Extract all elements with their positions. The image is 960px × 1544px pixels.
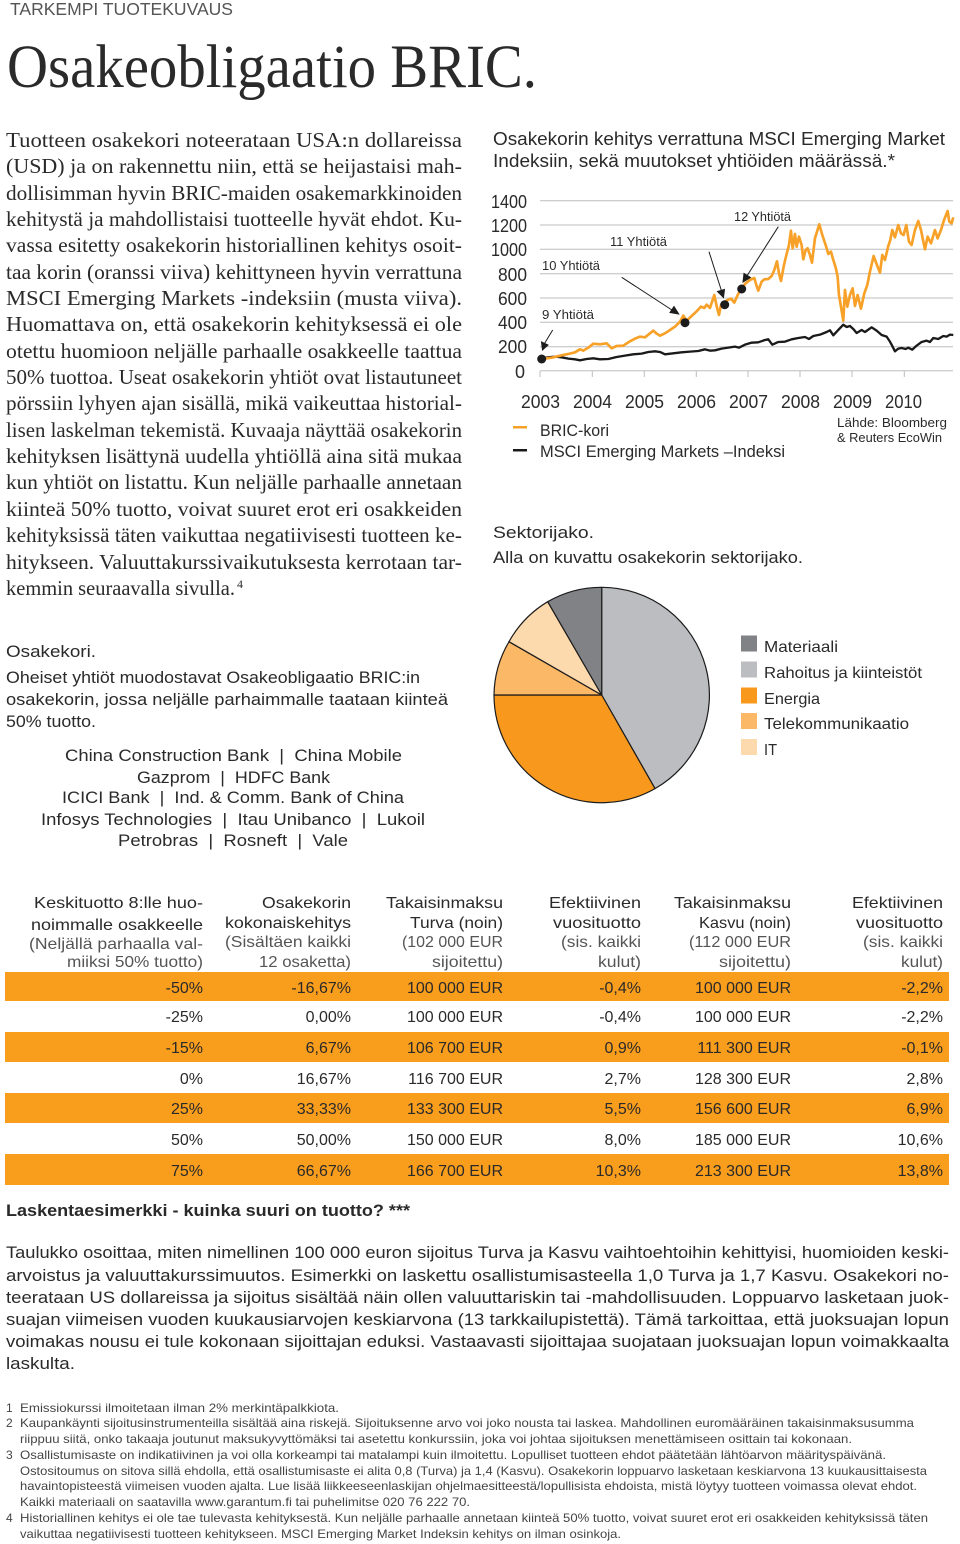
table header: (Sisältäen kaikki — [225, 934, 351, 951]
chart source note: Lähde: Bloomberg — [837, 415, 947, 430]
footnotes: Historiallinen kehitys ei ole tae tulevasta kehityksestä. Kun neljälle parhaalle annetaan kiinteä 50% tuotto, voivat suuret erot eri osakkeiden kehityksissä täten — [20, 1511, 928, 1525]
text block: basket — [6, 642, 449, 731]
chart legend: MSCI Emerging Markets –Indeksi — [540, 443, 785, 461]
company list — [41, 746, 425, 850]
table header: kulut) — [598, 954, 641, 971]
y axis labels: 1400 — [491, 192, 527, 212]
text block: product description: kehityksissä täten vaikuttaa negatiivisesti tuotteen ke- — [6, 523, 462, 547]
line chart — [491, 192, 953, 412]
table rows: 25% — [171, 1101, 203, 1118]
x axis labels — [521, 392, 922, 412]
table rows: 0,9% — [605, 1040, 641, 1057]
series: MSCI Emerging Markets — [542, 325, 953, 360]
table header: kulut) — [901, 954, 943, 971]
footnotes: 2 — [6, 1416, 13, 1430]
pie legend: Rahoitus ja kiinteistöt — [764, 665, 923, 682]
table rows: -2,2% — [901, 1009, 943, 1026]
table header: vuosituotto — [553, 915, 641, 932]
heading: sector split: Sektorijako. — [493, 523, 594, 542]
chart source note: & Reuters EcoWin — [837, 430, 942, 445]
footnotes — [6, 1401, 928, 1541]
text block: calculation example: arvoistus ja valuuttakurssimuutos. Esimerkki on laskettu osallistumisasteella 1,0 Turva ja 1,7 Kasvu. Osakekori no- — [6, 1266, 949, 1285]
table rows: -2,2% — [901, 980, 943, 997]
table rows: 10,6% — [898, 1132, 943, 1149]
calculation heading: Laskentaesimerkki - kuinka suuri on tuotto? *** — [6, 1201, 410, 1220]
table rows: 213 300 EUR — [695, 1163, 791, 1180]
text block: product description: kehityksen lisättynä uudella yhtiöllä aina sitä mukaa — [6, 444, 463, 468]
text block: basket: Osakekori. — [6, 642, 96, 661]
pie chart: sectors — [494, 587, 709, 803]
chart legend: BRIC-kori — [540, 422, 609, 440]
pie legend: Materiaali — [764, 639, 838, 656]
table rows: 100 000 EUR — [695, 1009, 791, 1026]
text block: calculation example: voimakas nousu ei tule kokonaan sijoittajan eduksi. Vastaavasti sijoittajaa suojataan juoksuajan lopun voimakkaalta — [6, 1332, 950, 1351]
footnotes: Ostositoumus on sitova sillä ehdolla, että osallistumisaste ei alita 0,8 (Turva) ja 1,4 (Kasvu). Osakekorin loppuarvo lasketaan keskiarvona 13 kuukausittaisesta — [20, 1464, 927, 1478]
table header: vuosituotto — [856, 915, 943, 932]
text block: product description: otettu huomioon neljälle parhaalle osakkeelle taattua — [6, 339, 463, 363]
table rows: 2,8% — [907, 1071, 943, 1088]
y axis labels: 1000 — [491, 240, 527, 260]
text block: product description: 4 — [237, 577, 243, 591]
text block: product description: (USD) ja on rakennettu niin, että se heijastaisi mah- — [6, 154, 462, 178]
company list: Infosys Technologies | Itau Unibanco | Lukoil — [41, 810, 425, 829]
x axis labels: 2005 — [625, 392, 664, 412]
footnotes: 1 — [6, 1401, 13, 1415]
table rows: 111 300 EUR — [697, 1040, 791, 1057]
table rows: 75% — [171, 1163, 203, 1180]
table rows: 166 700 EUR — [407, 1163, 503, 1180]
text block: basket: 50% tuotto. — [6, 712, 96, 731]
footnotes: havaintopisteestä viimeisen vuoden ajalta. Lue lisää liikkeeseenlaskijan ohjelmaesitteestä/lopullisista ehdoista, mistä löytyy tuotteen voimassa olevat ehdot. — [20, 1479, 917, 1493]
x axis labels: 2007 — [729, 392, 768, 412]
heading: sector split — [493, 523, 803, 567]
pie legend: Telekommunikaatio — [764, 716, 909, 733]
text block: product description: vassa esitetty osakekorin historiallinen kehitys osoit- — [6, 233, 462, 257]
table header: sijoitettu) — [719, 954, 791, 971]
text block: product description: pörssiin lyhyen ajan sisällä, mikä vaikeuttaa historial- — [6, 391, 462, 415]
table header: Takaisinmaksu — [386, 895, 503, 912]
table stripes — [5, 972, 949, 1185]
text block: basket: osakekorin, jossa neljälle parhaimmalle taataan kiinteä — [6, 690, 449, 709]
x axis labels: 2003 — [521, 392, 560, 412]
y axis labels — [491, 192, 527, 382]
table header: Takaisinmaksu — [674, 895, 791, 912]
x axis labels: 2010 — [885, 392, 922, 412]
chart legend — [513, 422, 785, 461]
chart heading: Indeksiin, sekä muutokset yhtiöiden määrässä.* — [493, 151, 895, 171]
text block: product description: Tuotteen osakekori noteerataan USA:n dollareissa — [6, 128, 463, 152]
table header: Kasvu (noin) — [699, 915, 791, 932]
table rows: 5,5% — [605, 1101, 641, 1118]
text block: calculation example: laskulta. — [6, 1354, 75, 1373]
table header: noimmalle osakkeelle — [31, 917, 203, 934]
footnotes: riippuu siitä, onko takaaja joutunut maksukyvyttömäksi tai asetettu konkurssiin, joka voi johtaa sijoituksen menettämiseen osittain tai kokonaan. — [20, 1432, 852, 1446]
table header: Turva (noin) — [410, 915, 503, 932]
title: Osakeobligaatio BRIC. — [7, 34, 537, 101]
heading: sector split: Alla on kuvattu osakekorin sektorijako. — [493, 548, 803, 567]
footnotes: Kaupankäynti sijoitusinstrumenteilla sisältää aina riskejä. Sijoituksenne arvo voi joko nousta tai laskea. Mahdollinen euromääräinen takaisinmaksusumma — [20, 1416, 914, 1430]
y axis labels: 200 — [498, 337, 527, 357]
table header: miiksi 50% tuotto) — [67, 954, 203, 971]
footnotes: Kaikki materiaali on saatavilla www.garantum.fi tai puhelimitse 020 76 222 70. — [20, 1495, 470, 1509]
y axis labels: 800 — [498, 265, 527, 285]
company list: ICICI Bank | Ind. & Comm. Bank of China — [62, 788, 405, 807]
company count markers — [537, 209, 792, 364]
footnotes: 4 — [6, 1511, 13, 1525]
text block: product description: kehitystä ja mahdollistaisi tuotteelle hyvät ehdot. Ku- — [6, 207, 462, 231]
table rows: 100 000 EUR — [407, 980, 503, 997]
table rows — [166, 980, 943, 1180]
y axis labels: 0 — [515, 362, 525, 382]
table rows: -0,4% — [599, 980, 641, 997]
table rows: 8,0% — [605, 1132, 641, 1149]
table rows: 100 000 EUR — [407, 1009, 503, 1026]
table rows: -16,67% — [291, 980, 351, 997]
chart source note — [837, 415, 947, 445]
text block: product description: 50% tuottoa. Useat osakekorin yhtiöt ovat listautuneet — [6, 365, 462, 389]
table header: (Neljällä parhaalla val- — [29, 936, 203, 953]
table rows: 133 300 EUR — [407, 1101, 503, 1118]
table rows: -0,1% — [901, 1040, 943, 1057]
text block: product description: kiinteä 50% tuotto, voivat suuret erot eri osakkeiden — [6, 497, 463, 521]
table header: Osakekorin — [262, 895, 351, 912]
pie legend — [741, 636, 923, 759]
table rows: 2,7% — [605, 1071, 641, 1088]
table rows: 10,3% — [596, 1163, 641, 1180]
table rows: 116 700 EUR — [408, 1071, 503, 1088]
chart heading: Osakekorin kehitys verrattuna MSCI Emerging Market — [493, 129, 945, 149]
table rows: 6,67% — [306, 1040, 351, 1057]
footnotes: Emissiokurssi ilmoitetaan ilman 2% merkintäpalkkiota. — [20, 1401, 339, 1415]
pie legend: IT — [764, 742, 777, 759]
table header: Efektiivinen — [852, 895, 943, 912]
table rows: 0% — [180, 1071, 203, 1088]
table header — [29, 895, 943, 971]
company count markers: 11 Yhtiötä — [610, 234, 668, 249]
table rows: 50,00% — [297, 1132, 351, 1149]
text block: product description: taa korin (oranssi viiva) kehittyneen hyvin verrattuna — [6, 260, 463, 284]
text block: product description: MSCI Emerging Markets -indeksiin (musta viiva). — [6, 286, 462, 310]
table rows: 50% — [171, 1132, 203, 1149]
table rows: -0,4% — [599, 1009, 641, 1026]
table rows: -50% — [166, 980, 203, 997]
table rows: 156 600 EUR — [695, 1101, 791, 1118]
table header: Efektiivinen — [549, 895, 641, 912]
table header: sijoitettu) — [432, 954, 503, 971]
table rows: -25% — [166, 1009, 203, 1026]
table rows: -15% — [166, 1040, 203, 1057]
text block: product description: lisen laskelman tekemistä. Kuvaaja näyttää osakekorin — [6, 418, 462, 442]
table rows: 106 700 EUR — [407, 1040, 503, 1057]
company list: China Construction Bank | China Mobile — [65, 746, 402, 765]
table rows: 16,67% — [297, 1071, 351, 1088]
text block: product description — [6, 128, 463, 600]
text block: product description: dollisimman hyvin BRIC-maiden osakemarkkinoiden — [6, 181, 463, 205]
x axis labels: 2009 — [833, 392, 872, 412]
table rows: 6,9% — [907, 1101, 943, 1118]
text block: calculation example: suajan viimeisen vuoden kuukausiarvojen keskiarvona (13 tarkkailupistettä). Tämä tarkoittaa, että juoksuajan lopun — [6, 1310, 949, 1329]
table rows: 128 300 EUR — [695, 1071, 791, 1088]
table rows: 150 000 EUR — [407, 1132, 503, 1149]
text block: product description: Huomattava on, että osakekorin kehityksessä ei ole — [6, 312, 462, 336]
table header: 12 osaketta) — [259, 954, 351, 971]
table rows: 185 000 EUR — [695, 1132, 791, 1149]
x axis labels: 2004 — [573, 392, 612, 412]
text block: calculation example: teerataan US dollareissa ja sijoitus sisältää näin ollen valuuttariskin tai -mahdollisuuden. Loppuarvo lasketaan juok- — [6, 1288, 949, 1307]
table header: Keskituotto 8:lle huo- — [34, 895, 203, 912]
x axis labels: 2008 — [781, 392, 820, 412]
table rows: 0,00% — [306, 1009, 351, 1026]
footnotes: 3 — [6, 1448, 13, 1462]
chart heading — [493, 129, 945, 171]
company count markers: 12 Yhtiötä — [734, 209, 792, 224]
table rows: 13,8% — [898, 1163, 943, 1180]
text block: product description: kun yhtiöt on listattu. Kun neljälle parhaalle annetaan — [6, 470, 463, 494]
text block: calculation example — [6, 1243, 950, 1373]
table header: (112 000 EUR — [689, 934, 791, 951]
text block: product description: kemmin seuraavalla sivulla. — [6, 576, 235, 600]
x axis labels: 2006 — [677, 392, 716, 412]
table rows: 100 000 EUR — [695, 980, 791, 997]
y axis labels: 1200 — [491, 216, 527, 236]
footnotes: Osallistumisaste on indikatiivinen ja voi olla korkeampi tai matalampi kuin ilmoitettu. Lopulliset tuotteen ehdot päätetään lähtöarvon määrityspäivänä. — [20, 1448, 886, 1462]
text block: basket: Oheiset yhtiöt muodostavat Osakeobligaatio BRIC:in — [6, 668, 420, 687]
text block: product description: hitykseen. Valuuttakurssivaikutuksesta kerrotaan tar- — [6, 550, 462, 574]
pie legend: Energia — [764, 691, 820, 708]
company list: Gazprom | HDFC Bank — [137, 768, 331, 787]
company count markers: 10 Yhtiötä — [542, 258, 601, 273]
footnotes: vaikuttaa negatiivisesti tuotteen kehitykseen. MSCI Emerging Market Indeksin kehitys on ilman osinkoja. — [20, 1527, 621, 1541]
table rows: 66,67% — [297, 1163, 351, 1180]
y axis labels: 400 — [498, 313, 527, 333]
table header: (102 000 EUR — [402, 934, 503, 951]
table header: (sis. kaikki — [863, 934, 943, 951]
table header: kokonaiskehitys — [225, 915, 351, 932]
table header: (sis. kaikki — [561, 934, 641, 951]
table rows: 33,33% — [297, 1101, 351, 1118]
company list: Petrobras | Rosneft | Vale — [118, 831, 348, 850]
company count markers: 9 Yhtiötä — [542, 307, 595, 322]
series: BRIC-kori — [542, 211, 953, 359]
return table — [5, 895, 949, 1185]
text block: calculation example: Taulukko osoittaa, miten nimellinen 100 000 euron sijoitus Turva ja Kasvu vaihtoehtoihin kehittyisi, huomioiden keski- — [6, 1243, 949, 1262]
y axis labels: 600 — [498, 289, 527, 309]
